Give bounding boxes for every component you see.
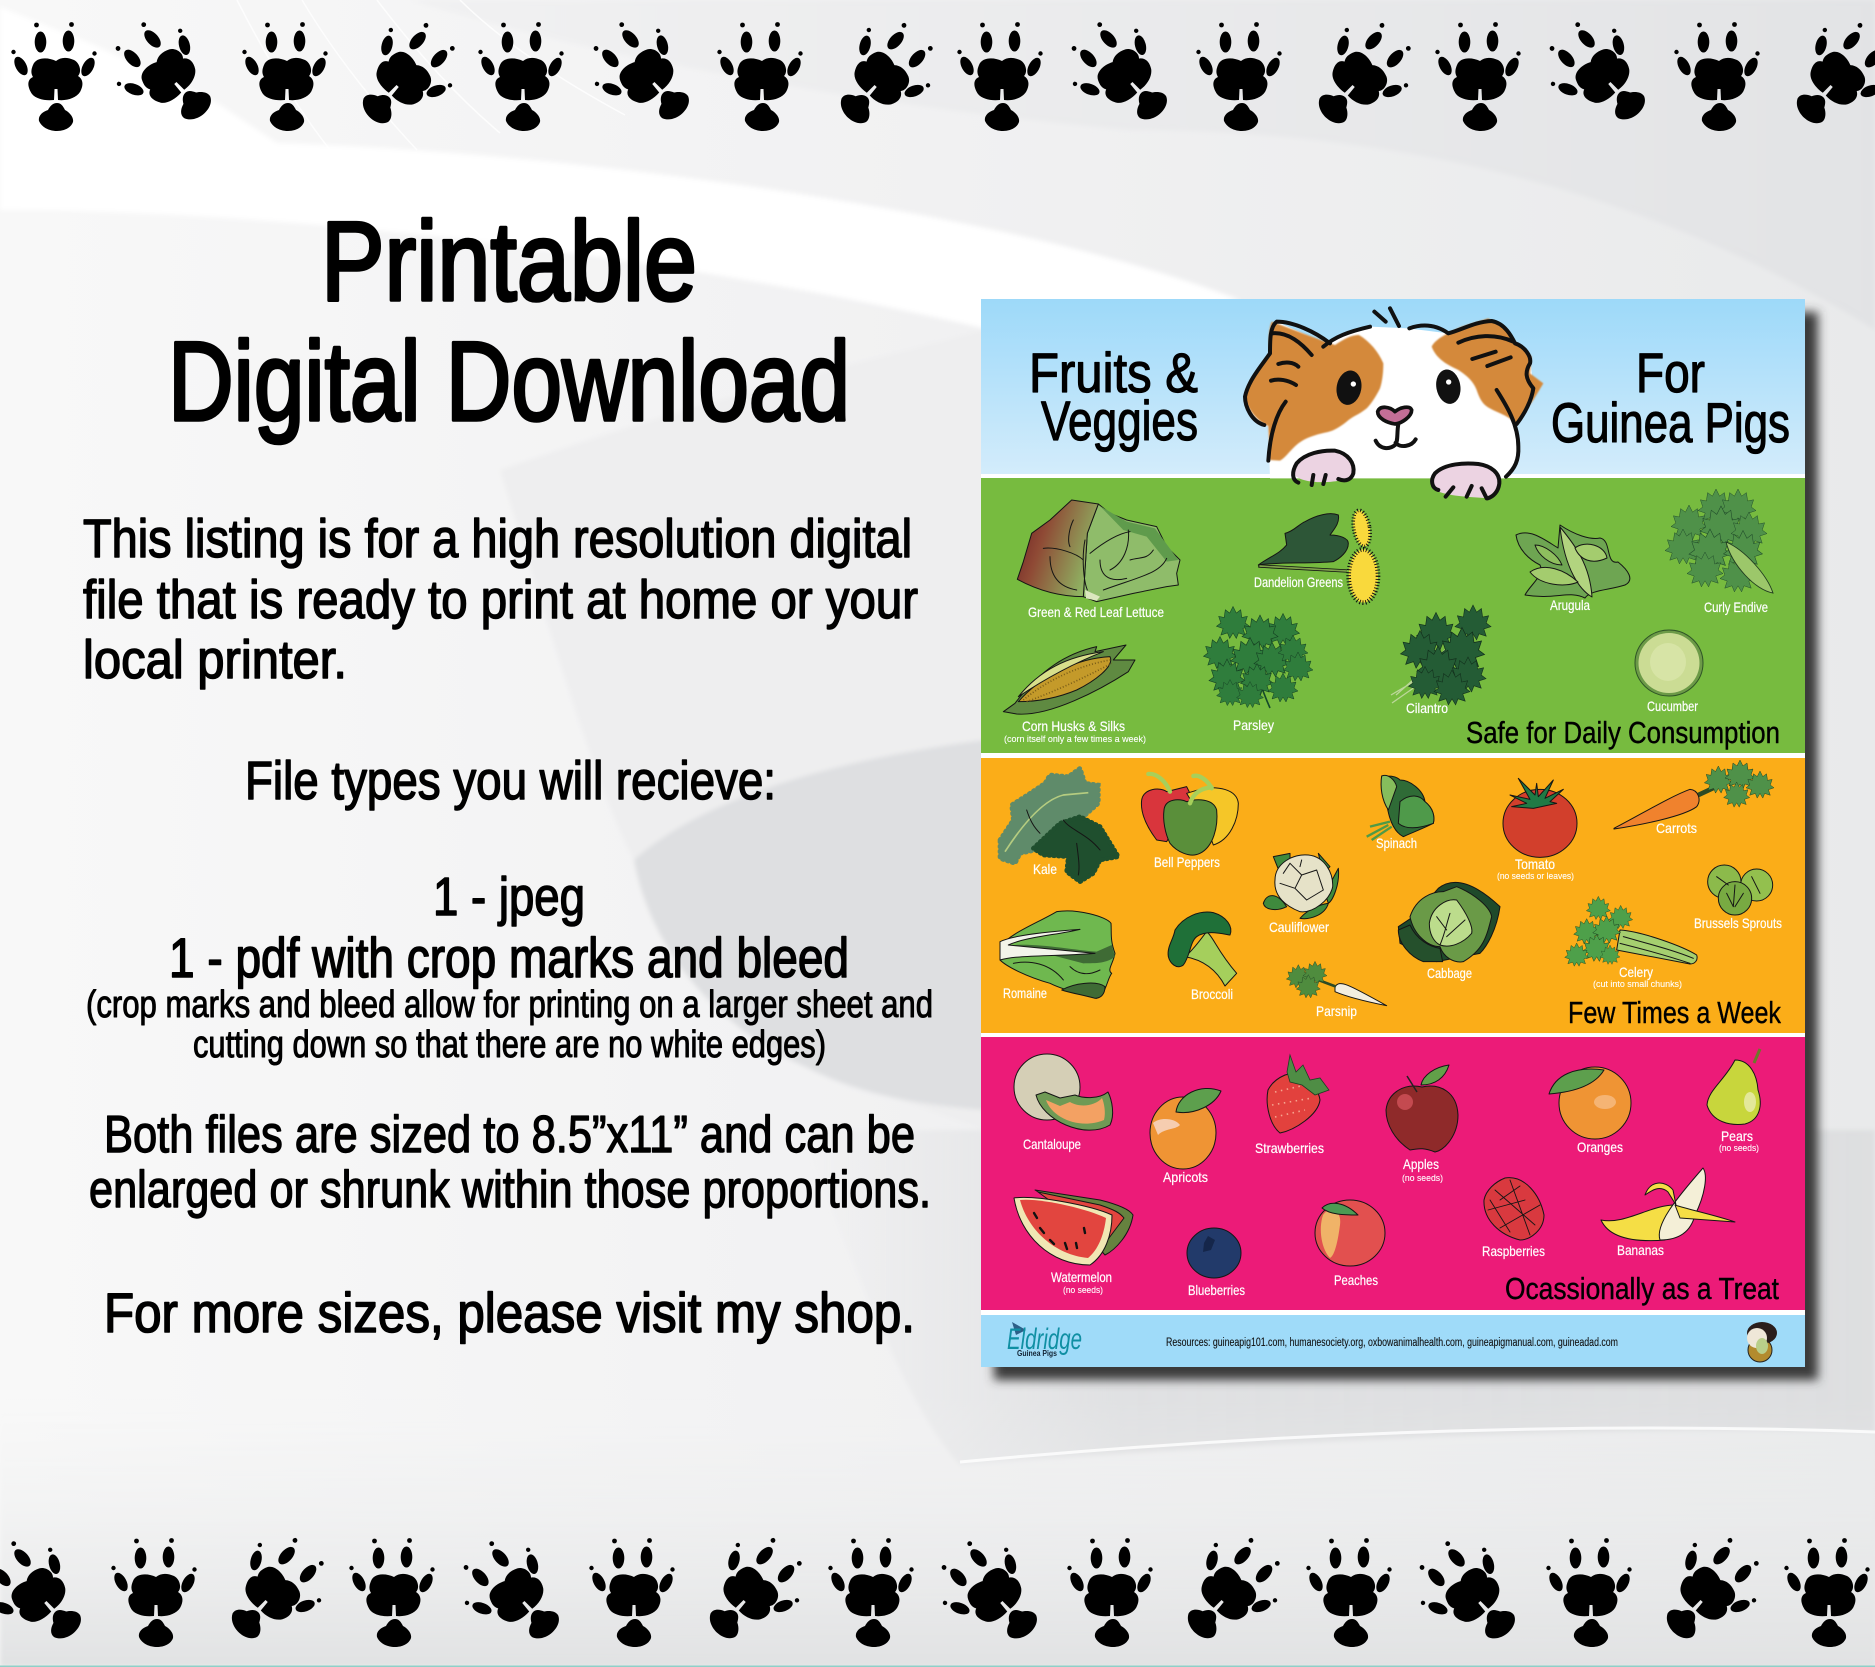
icon: tomato bbox=[1503, 778, 1577, 857]
icon: parsley bbox=[1204, 606, 1313, 708]
icon: curly endive bbox=[1665, 489, 1773, 593]
panel heading: daily: Safe for Daily Consumption bbox=[1466, 715, 1780, 750]
label: broccoli: Broccoli bbox=[1191, 986, 1233, 1002]
file types list: (crop marks and bleed allow for printing on a larger sheet and bbox=[86, 984, 933, 1026]
file types heading: File types you will recieve: bbox=[245, 751, 776, 811]
shop note: For more sizes, please visit my shop. bbox=[104, 1281, 915, 1344]
icon: strawberry bbox=[1267, 1055, 1329, 1133]
label: strawberries: Strawberries bbox=[1255, 1140, 1324, 1156]
label: pears: Pears bbox=[1721, 1128, 1753, 1144]
title bbox=[168, 199, 850, 444]
green panel bbox=[981, 478, 1805, 753]
icon: romaine bbox=[1000, 911, 1115, 998]
label: peaches: Peaches bbox=[1334, 1272, 1378, 1288]
file types list bbox=[86, 867, 933, 1066]
label: arugula: Arugula bbox=[1550, 597, 1590, 613]
icon: carrot bbox=[1614, 760, 1774, 829]
label: cantaloupe: Cantaloupe bbox=[1023, 1136, 1081, 1152]
icon: bell peppers bbox=[1141, 774, 1238, 855]
title: Digital Download bbox=[168, 319, 850, 444]
label: oranges: Oranges bbox=[1577, 1139, 1623, 1155]
note: celery: (cut into small chunks) bbox=[1593, 979, 1682, 990]
icon: orange bbox=[1549, 1067, 1631, 1139]
footer guinea pig icon bbox=[1747, 1322, 1777, 1362]
note: pears: (no seeds) bbox=[1719, 1143, 1759, 1154]
label: cilantro: Cilantro bbox=[1406, 700, 1448, 716]
file types list: 1 - pdf with crop marks and bleed bbox=[169, 926, 849, 989]
icon: dandelion greens bbox=[1258, 509, 1378, 603]
icon: lettuce bbox=[1017, 500, 1180, 602]
bottom paw print border bbox=[0, 1521, 1870, 1663]
icon: brussels sprouts bbox=[1708, 865, 1773, 915]
top paw print border bbox=[11, 5, 1875, 145]
footer band bbox=[981, 1315, 1805, 1367]
label: raspberries: Raspberries bbox=[1482, 1243, 1545, 1259]
pink panel bbox=[981, 1037, 1805, 1310]
file types list: cutting down so that there are no white edges) bbox=[193, 1024, 826, 1066]
footer logo: Guinea Pigs bbox=[1017, 1349, 1057, 1358]
note: apples: (no seeds) bbox=[1402, 1173, 1443, 1184]
panel heading: treats: Ocassionally as a Treat bbox=[1505, 1271, 1779, 1306]
label: romaine: Romaine bbox=[1003, 985, 1047, 1001]
label: parsley: Parsley bbox=[1233, 717, 1274, 733]
file size text block: enlarged or shrunk within those proportions. bbox=[89, 1161, 931, 1219]
label: kale: Kale bbox=[1033, 861, 1057, 877]
icon: pear bbox=[1707, 1049, 1760, 1124]
icon: apricot bbox=[1150, 1088, 1221, 1169]
label: cucumber: Cucumber bbox=[1647, 698, 1698, 714]
poster bbox=[981, 299, 1805, 1367]
icon: cucumber bbox=[1635, 630, 1703, 696]
footer logo: Eldridge bbox=[1007, 1323, 1082, 1356]
icon: parsnip bbox=[1286, 961, 1387, 1006]
icon: apple bbox=[1386, 1065, 1458, 1152]
label: bananas: Bananas bbox=[1617, 1242, 1664, 1258]
poster heading: fruits and veggies: Fruits & bbox=[1029, 341, 1198, 404]
icon: spinach bbox=[1367, 775, 1434, 840]
poster drop shadow bbox=[994, 312, 1818, 1380]
note: watermelon: (no seeds) bbox=[1063, 1285, 1103, 1296]
icon: corn bbox=[1003, 645, 1135, 714]
icon: raspberry bbox=[1484, 1178, 1544, 1240]
file size text block: Both files are sized to 8.5”x11” and can be bbox=[104, 1106, 915, 1164]
label: dandelion greens: Dandelion Greens bbox=[1254, 574, 1343, 590]
poster heading: fruits and veggies bbox=[1029, 341, 1198, 452]
label: parsnip: Parsnip bbox=[1316, 1003, 1357, 1019]
poster heading: for guinea pigs: Guinea Pigs bbox=[1551, 391, 1790, 454]
icon: arugula bbox=[1516, 525, 1630, 598]
label: apples: Apples bbox=[1403, 1156, 1439, 1172]
label: brussels sprouts: Brussels Sprouts bbox=[1694, 915, 1782, 931]
label: celery: Celery bbox=[1619, 964, 1653, 980]
label: blueberries: Blueberries bbox=[1188, 1282, 1245, 1298]
footer resources: Resources: guineapig101.com, humanesociety.org, oxbowanimalhealth.com, guineapigmanual.com, guineadad.com bbox=[1166, 1337, 1618, 1349]
label: tomato: Tomato bbox=[1515, 856, 1555, 872]
icon: cabbage bbox=[1398, 882, 1500, 962]
poster heading: fruits and veggies: Veggies bbox=[1041, 389, 1198, 452]
label: curly endive: Curly Endive bbox=[1704, 599, 1768, 615]
guinea pig illustration bbox=[1245, 308, 1543, 498]
panel heading: weekly: Few Times a Week bbox=[1568, 995, 1781, 1030]
icon: watermelon bbox=[1014, 1190, 1133, 1265]
icon: cantaloupe bbox=[1014, 1054, 1113, 1130]
file size text block bbox=[89, 1106, 931, 1219]
footer logo bbox=[1007, 1322, 1082, 1358]
poster heading: for guinea pigs: For bbox=[1636, 341, 1705, 404]
icon: banana bbox=[1601, 1168, 1735, 1241]
label: cauliflower: Cauliflower bbox=[1269, 919, 1329, 935]
intro text block: This listing is for a high resolution digital bbox=[83, 509, 912, 569]
icon: kale bbox=[1000, 768, 1118, 882]
label: bell peppers: Bell Peppers bbox=[1154, 854, 1220, 870]
title: Printable bbox=[321, 199, 697, 324]
orange panel bbox=[981, 758, 1805, 1033]
label: lettuce: Green & Red Leaf Lettuce bbox=[1028, 604, 1164, 620]
icon: blueberry bbox=[1187, 1228, 1241, 1278]
icon: celery bbox=[1565, 896, 1697, 966]
intro text block bbox=[83, 509, 918, 690]
icon: peach bbox=[1315, 1200, 1385, 1266]
icon: broccoli bbox=[1168, 912, 1237, 986]
intro text block: file that is ready to print at home or your bbox=[83, 570, 918, 630]
note: corn: (corn itself only a few times a week) bbox=[1004, 734, 1146, 745]
intro text block: local printer. bbox=[83, 630, 347, 690]
label: carrots: Carrots bbox=[1656, 820, 1697, 836]
label: spinach: Spinach bbox=[1376, 835, 1417, 851]
icon: cauliflower bbox=[1263, 853, 1339, 919]
icon: cilantro bbox=[1391, 605, 1491, 705]
note: tomato: (no seeds or leaves) bbox=[1497, 871, 1574, 882]
label: apricots: Apricots bbox=[1163, 1169, 1208, 1185]
label: corn husks: Corn Husks & Silks bbox=[1022, 718, 1125, 734]
poster heading: for guinea pigs bbox=[1551, 341, 1790, 454]
file types list: 1 - jpeg bbox=[433, 867, 585, 927]
label: cabbage: Cabbage bbox=[1427, 965, 1472, 981]
label: watermelon: Watermelon bbox=[1051, 1269, 1112, 1285]
poster header band bbox=[981, 299, 1805, 474]
